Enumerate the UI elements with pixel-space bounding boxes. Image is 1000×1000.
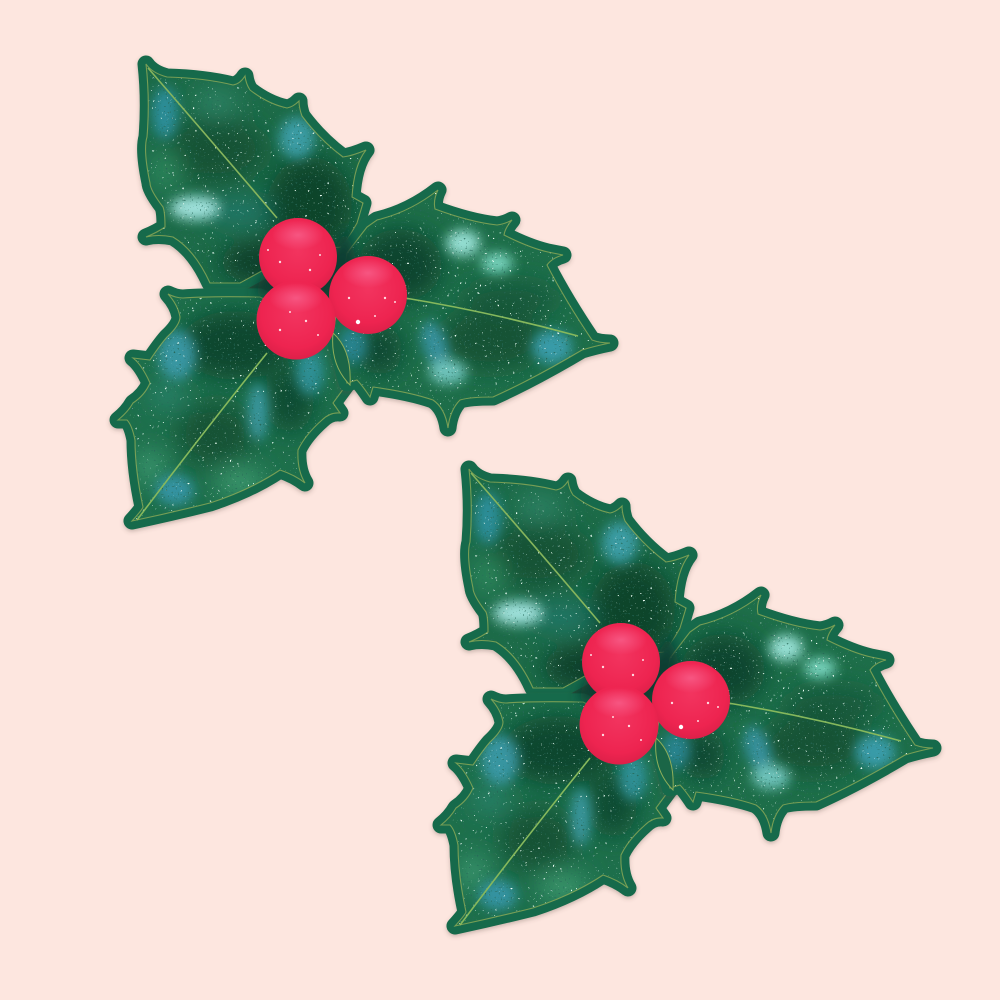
small leaf and centre shadow (578, 630, 683, 790)
small leaf and centre shadow (255, 225, 360, 385)
holly sprig: upper left (105, 60, 615, 530)
centre underlay (548, 630, 688, 750)
red berries cluster (256, 218, 407, 360)
leaf: top (130, 60, 380, 300)
leaf: bottom left (428, 685, 688, 935)
leaf: top (453, 465, 703, 705)
leaf: right (648, 585, 938, 840)
leaf: bottom left (105, 280, 365, 530)
centre underlay (225, 225, 365, 345)
holly sprig: lower right (428, 465, 938, 935)
red berries cluster (580, 623, 730, 764)
leaf: right (325, 180, 615, 435)
illustration: two holly sprigs (108, 56, 944, 938)
